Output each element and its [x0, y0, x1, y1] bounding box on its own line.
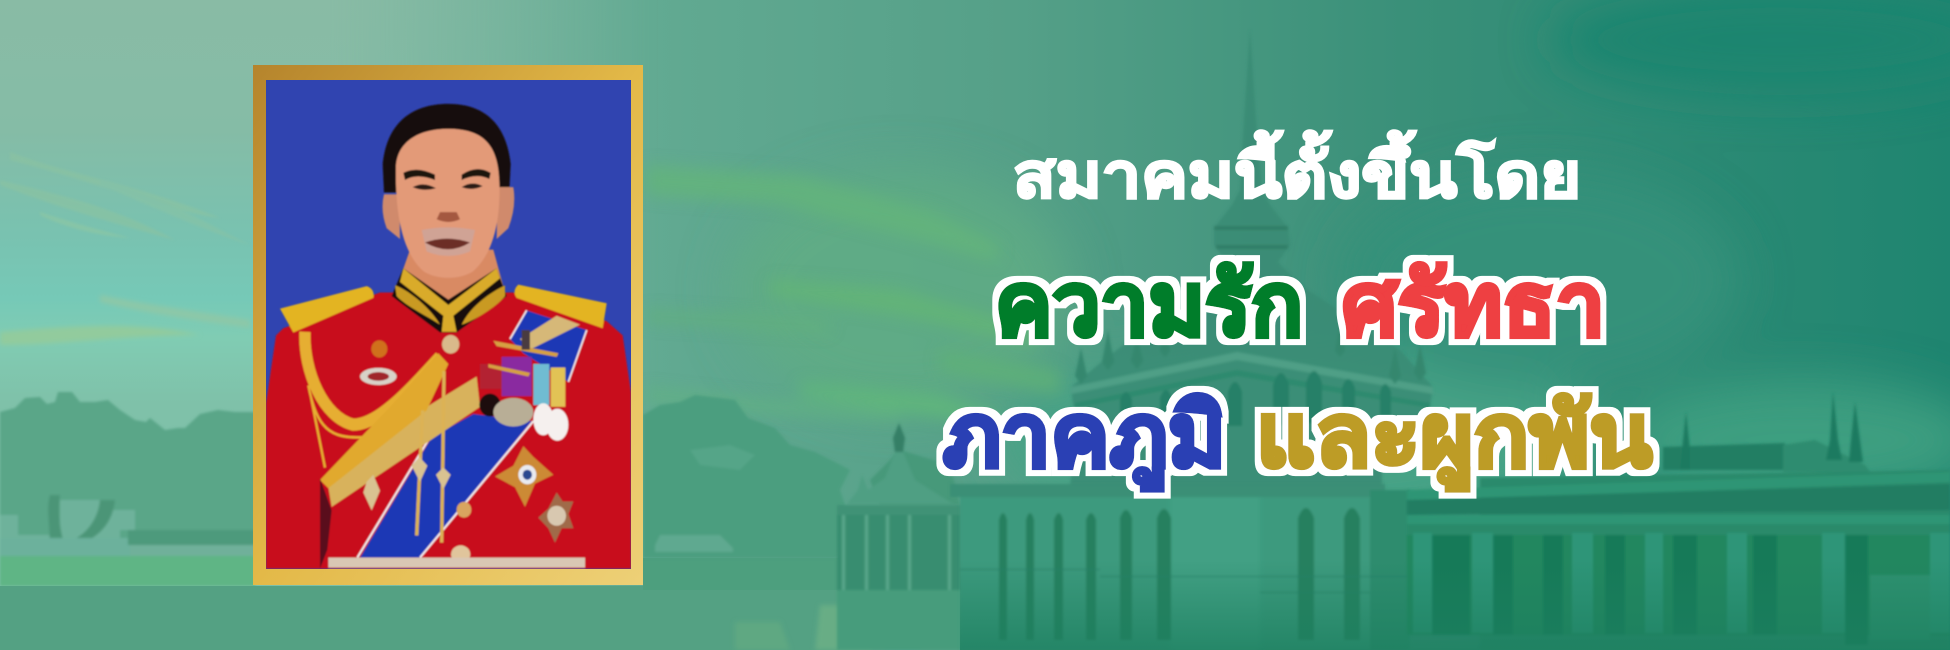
star decoration: [495, 446, 553, 507]
heading: white line: สมาคมนี้ตั้งขึ้นโดย: [1013, 130, 1581, 211]
medal ribbons: [480, 364, 503, 389]
aiguillette: [305, 332, 440, 425]
badges: [371, 340, 387, 358]
gold sash band: [328, 376, 480, 507]
belt: [328, 558, 585, 568]
background: temple main body: [950, 484, 1415, 650]
photo frame: [253, 65, 643, 585]
heading: bond: และผูกพัน: [1256, 386, 1652, 491]
portrait: [266, 102, 631, 569]
background: pavilion: [837, 423, 962, 650]
cords: [417, 371, 444, 543]
sash: [360, 414, 532, 558]
background: trees centre: [643, 395, 960, 558]
arm shadow: [320, 478, 332, 569]
background: water: [0, 558, 920, 650]
background: trees left: [0, 392, 255, 586]
heading: faith: ศรัทธา: [1342, 255, 1605, 354]
ears: [382, 187, 514, 239]
heading: pride: ภาคภูมิ: [943, 386, 1226, 491]
heading: love: ความรัก: [995, 255, 1303, 354]
epaulette left: [280, 286, 374, 333]
background: bottom fade: [960, 560, 1950, 650]
face: [396, 129, 499, 278]
buttons: [442, 335, 459, 354]
hair: [383, 104, 511, 193]
neck: [395, 250, 505, 332]
background: colonnade: [1407, 392, 1950, 650]
epaulette right: [515, 285, 607, 328]
background: temple upper: [1070, 29, 1433, 490]
collar: [392, 268, 507, 333]
